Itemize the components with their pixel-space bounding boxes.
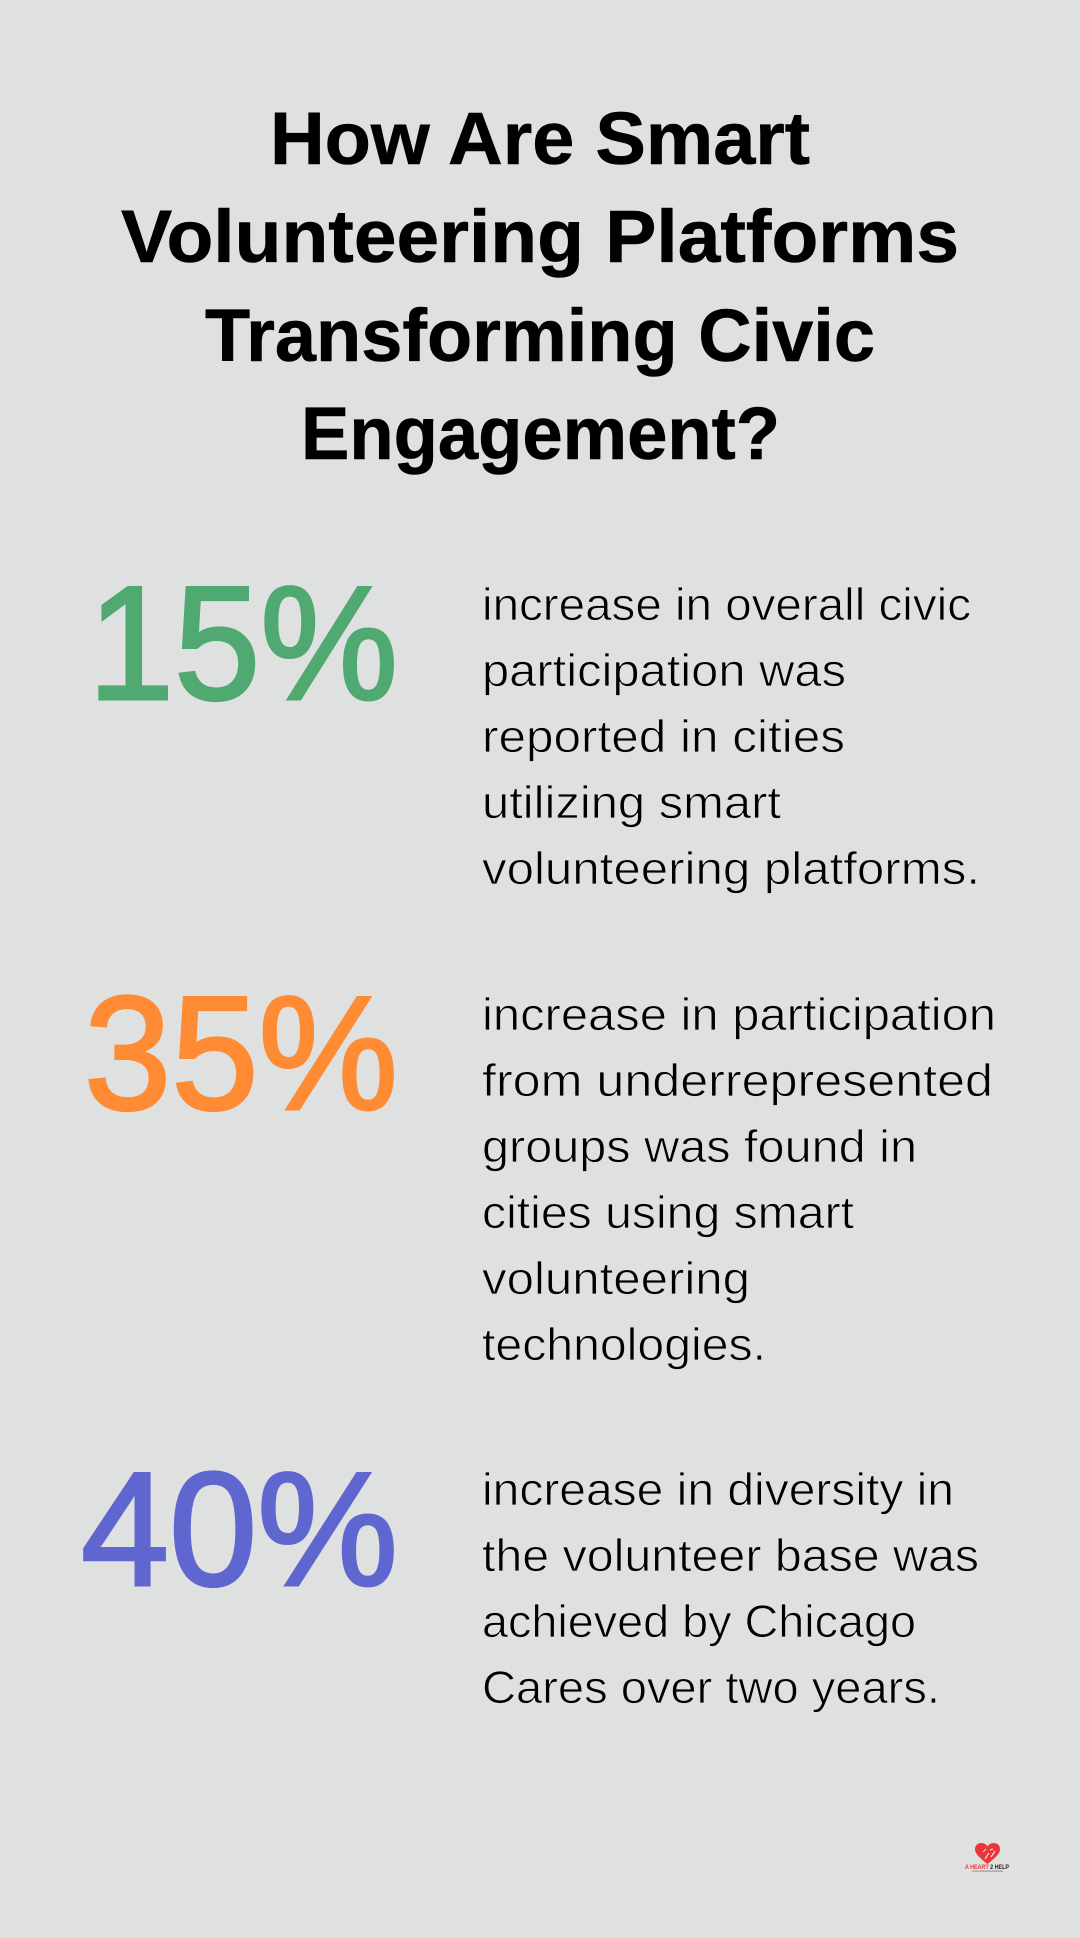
description: 35% bbox=[482, 989, 996, 1370]
icon: heart bbox=[975, 1843, 1000, 1864]
description: 35%: cities using smart bbox=[482, 1187, 855, 1238]
description: 35%: volunteering bbox=[482, 1253, 750, 1304]
description: 40% bbox=[482, 1464, 979, 1713]
number: 15%: 15% bbox=[88, 553, 398, 734]
logo wordmark: A HEART 2 HELP bbox=[965, 1864, 1010, 1871]
title bbox=[121, 97, 959, 475]
description: 15%: reported in cities bbox=[482, 711, 845, 762]
description: 35%: groups was found in bbox=[482, 1121, 917, 1172]
description: 15%: utilizing smart bbox=[482, 777, 782, 828]
description: 40%: achieved by Chicago bbox=[482, 1596, 916, 1647]
title: Engagement? bbox=[301, 392, 780, 475]
title: How Are Smart bbox=[270, 97, 810, 180]
logo: A Heart 2 Help bbox=[965, 1843, 1010, 1872]
description: 40%: Cares over two years. bbox=[482, 1662, 940, 1713]
description: 35%: technologies. bbox=[482, 1319, 766, 1370]
stat: 15% bbox=[88, 553, 980, 894]
stat: 40% bbox=[81, 1439, 979, 1713]
description: 35%: from underrepresented bbox=[482, 1055, 993, 1106]
description: 15%: volunteering platforms. bbox=[482, 843, 980, 894]
description: 15%: increase in overall civic bbox=[482, 579, 971, 630]
description: 15% bbox=[482, 579, 980, 894]
number: 40%: 40% bbox=[81, 1439, 398, 1620]
description: 40%: increase in diversity in bbox=[482, 1464, 954, 1515]
number: 35%: 35% bbox=[84, 963, 398, 1144]
stat: 35% bbox=[84, 963, 996, 1370]
description: 15%: participation was bbox=[482, 645, 846, 696]
description: 35%: increase in participation bbox=[482, 989, 996, 1040]
description: 40%: the volunteer base was bbox=[482, 1530, 979, 1581]
title: Volunteering Platforms bbox=[121, 195, 959, 278]
title: Transforming Civic bbox=[205, 294, 875, 377]
